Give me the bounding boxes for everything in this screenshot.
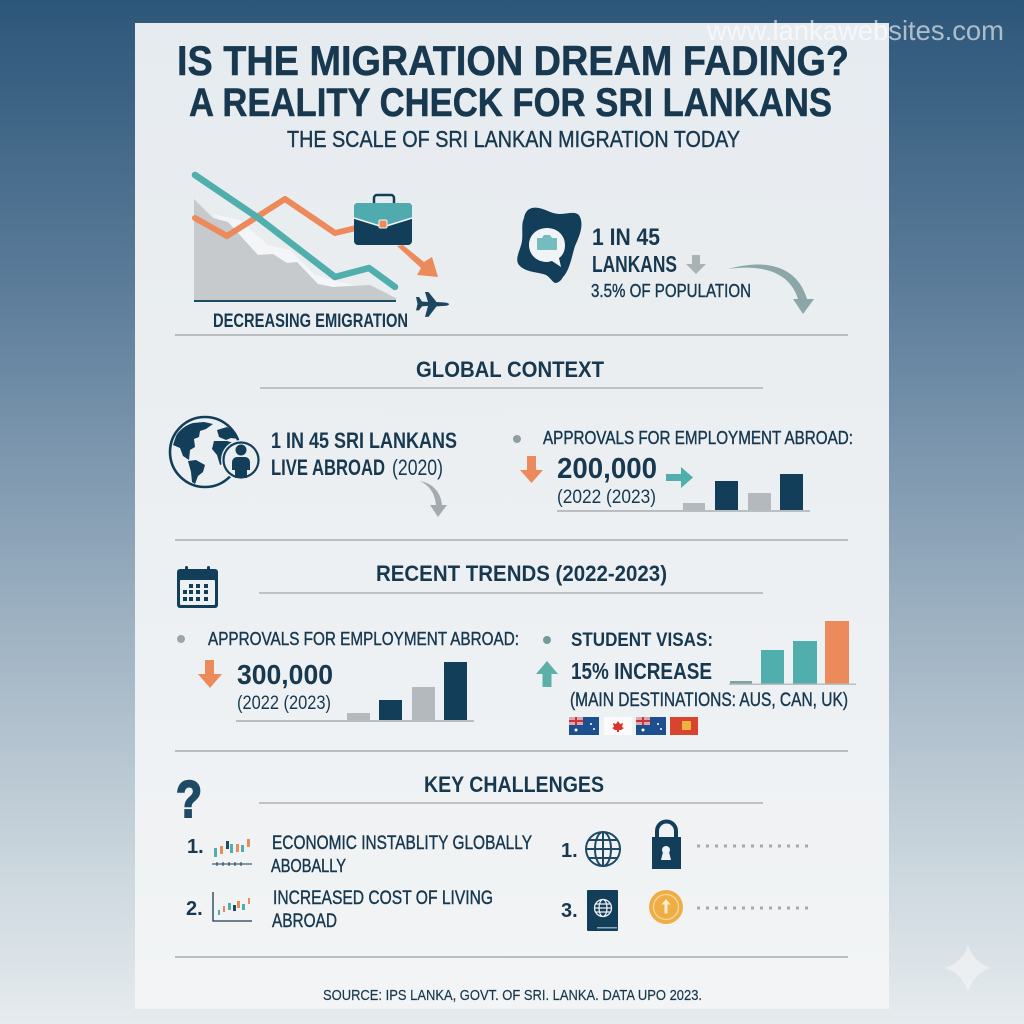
- panel: approvals 300,000: [177, 629, 519, 722]
- icon: blob with speech bubble: [517, 208, 581, 283]
- icon: wire globe: [586, 832, 620, 866]
- icon: teal up arrow: [536, 661, 558, 687]
- orange line: [195, 199, 356, 236]
- panel: live abroad: [170, 417, 457, 517]
- panel: live abroad: LIVE ABROAD: [271, 455, 385, 480]
- panel: approvals 200,000: APPROVALS FOR EMPLOYMENT ABROAD:: [543, 428, 853, 448]
- panel: decreasing emigration chart: [194, 175, 449, 332]
- panel: 1 in 45 stat: LANKANS: [592, 251, 677, 277]
- panel: challenges list: ECONOMIC INSTABLITY GLOBALLY: [272, 833, 532, 854]
- teal line: [195, 175, 395, 287]
- curved arrow: [728, 265, 814, 314]
- bar chart: [729, 621, 856, 685]
- icon: airplane: [416, 292, 449, 317]
- icon: briefcase: [354, 195, 412, 245]
- orange arrow: [397, 245, 438, 277]
- chart caption: DECREASING EMIGRATION: [213, 311, 408, 332]
- subtitle: THE SCALE OF SRI LANKAN MIGRATION TODAY: [287, 126, 740, 152]
- panel: challenges list: ABROAD: [272, 911, 337, 932]
- panel: approvals 200,000: [513, 428, 853, 512]
- heading: global context: GLOBAL CONTEXT: [416, 357, 605, 382]
- panel: live abroad: (2020): [392, 455, 443, 480]
- population share: 3.5% OF POPULATION: [591, 281, 751, 301]
- heading: key challenges: KEY CHALLENGES: [424, 772, 604, 797]
- title line 2: A REALITY CHECK FOR SRI LANKANS: [189, 81, 832, 125]
- icon: sparkle: [945, 945, 991, 992]
- main panel: [135, 23, 889, 1009]
- watermark: www.lankawebsites.com: [706, 15, 1004, 46]
- panel: student visas: [536, 621, 856, 735]
- icon: candlestick chart 1: [212, 839, 252, 866]
- icon: padlock: [652, 822, 681, 869]
- panel: approvals 300,000: (2022 (2023): [237, 693, 331, 714]
- stat text: 1 IN 45: [592, 224, 660, 251]
- panel: approvals 200,000: (2022 (2023): [557, 487, 656, 508]
- panel: challenges list: 1.: [187, 836, 204, 858]
- axis: [194, 300, 396, 302]
- panel: challenges list: 2.: [186, 898, 203, 920]
- icon: orange down arrow: [520, 456, 543, 483]
- dotted line: [697, 844, 810, 848]
- icon: passport: [587, 890, 618, 931]
- panel: approvals 300,000: APPROVALS FOR EMPLOYMENT ABROAD:: [208, 629, 519, 649]
- icon: globe with person: [170, 417, 261, 487]
- panel: challenge icons: 1.: [561, 840, 578, 862]
- panel: challenges list: ABOBALLY: [271, 856, 346, 876]
- panel: challenges list: [186, 833, 532, 932]
- panel: challenges list: INCREASED COST OF LIVING: [273, 888, 493, 909]
- bar chart: [236, 662, 474, 722]
- dotted line: [697, 906, 810, 910]
- source note: SOURCE: IPS LANKA, GOVT. OF SRI. LANKA. DATA UPO 2023.: [323, 987, 702, 1004]
- gray area: [194, 199, 396, 301]
- icon: calendar: [177, 566, 218, 608]
- panel: student visas: 15% INCREASE: [571, 658, 712, 684]
- small down arrow: [686, 255, 706, 274]
- heading: recent trends: RECENT TRENDS (2022-2023): [376, 561, 667, 586]
- text: live abroad: 1 IN 45 SRI LANKANS: [271, 428, 457, 453]
- panel: student visas: (MAIN DESTINATIONS: AUS, CAN, UK): [570, 690, 848, 711]
- bar chart: [557, 474, 810, 512]
- pale haze beside area: [213, 214, 396, 301]
- panel: challenge icons: 3.: [561, 900, 578, 922]
- icon: candlestick chart 2: [213, 892, 252, 921]
- panel: 1 in 45 stat: [517, 208, 814, 314]
- curved arrow: [420, 481, 447, 517]
- panel: challenge icons: [561, 822, 810, 931]
- flags: [569, 717, 698, 735]
- icon: teal right arrow: [666, 467, 693, 488]
- title line 1: IS THE MIGRATION DREAM FADING?: [177, 37, 849, 84]
- icon: coin: [649, 890, 683, 924]
- panel: approvals 300,000: 300,000: [237, 659, 333, 690]
- title block: [177, 37, 849, 152]
- icon: orange down arrow: [198, 660, 222, 688]
- panel: approvals 200,000: 200,000: [557, 453, 657, 485]
- panel: student visas: STUDENT VISAS:: [571, 630, 713, 651]
- icon: question mark: ?: [176, 771, 202, 829]
